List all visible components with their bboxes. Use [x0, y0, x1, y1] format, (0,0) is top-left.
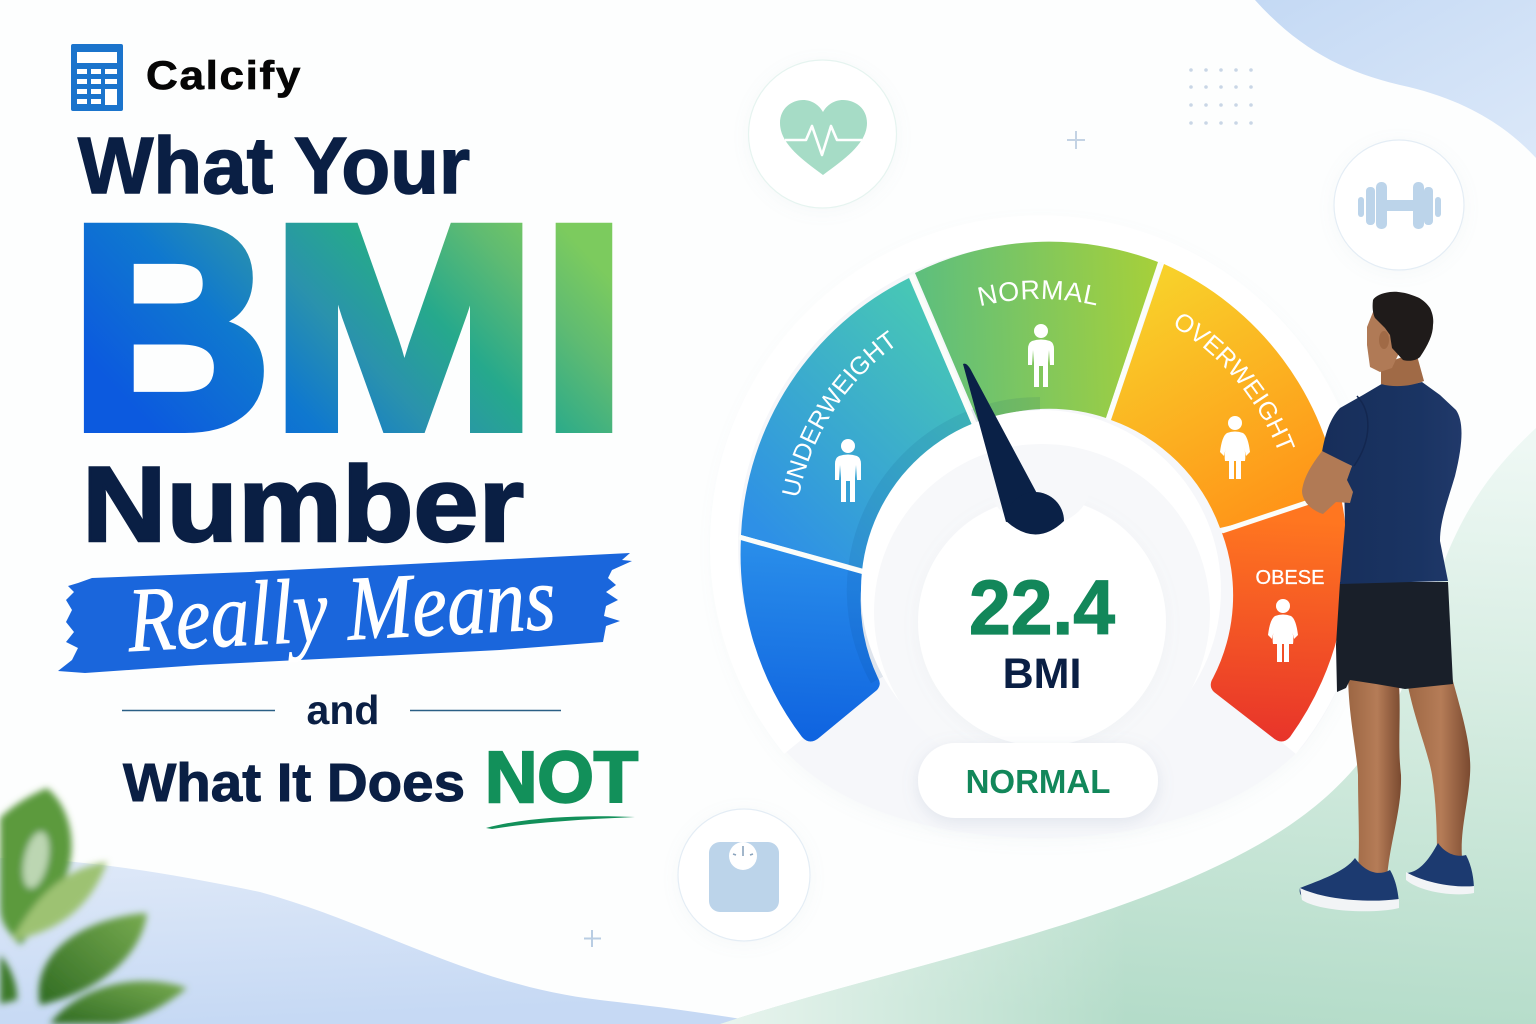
gauge outer white ring [724, 229, 1356, 745]
title line: BMI [70, 164, 628, 491]
decorative plus bottom [584, 930, 601, 947]
inner edge shade [854, 404, 1040, 680]
segment: obese [1211, 493, 1347, 742]
divider left [122, 710, 275, 712]
shirt [1322, 382, 1462, 584]
hair [1373, 292, 1433, 361]
logo text: Calcify [146, 54, 302, 98]
subtitle: NOT: NOT [485, 738, 638, 818]
icon: scale circle [678, 809, 810, 941]
person icon underweight [835, 439, 861, 502]
neck [1381, 352, 1424, 386]
leaves: blurred plant [0, 788, 187, 1024]
logo: calculator icon [71, 44, 123, 111]
background blob: bottom left blue [0, 858, 770, 1024]
subtitle: What It Does: What It Does [123, 753, 465, 813]
icon: dumbbell circle [1334, 140, 1464, 270]
label: UNDERWEIGHT: UNDERWEIGHT [782, 330, 894, 496]
background blob: bottom right green [720, 428, 1536, 1024]
centre white dial [918, 498, 1166, 746]
segment: normal [915, 242, 1158, 423]
back leg [1405, 670, 1470, 858]
decorative dot grid [1189, 68, 1253, 125]
label: OVERWEIGHT: OVERWEIGHT [1176, 314, 1295, 448]
value: 22.4: 22.4 [969, 565, 1115, 651]
title line: BMI: B [70, 166, 272, 490]
person icon normal [1028, 324, 1054, 387]
icon: heart circle [748, 60, 896, 208]
NOT underline swoosh [486, 816, 635, 829]
label: NORMAL: NORMAL [978, 280, 1096, 306]
status text: NORMAL [966, 763, 1110, 800]
man standing [1300, 292, 1474, 911]
needle notch [990, 446, 1090, 526]
arm [1302, 451, 1353, 514]
segment dividers [739, 262, 1345, 572]
label: OBESE: OBESE [1256, 567, 1324, 589]
status pill [918, 743, 1158, 818]
person icon overweight [1220, 416, 1250, 479]
title line: Number: Number [82, 444, 524, 564]
person icon obese [1268, 599, 1298, 662]
front leg [1348, 670, 1401, 878]
title line: BMI: I [540, 164, 628, 490]
title line: BMI: M [270, 166, 538, 491]
inner pale disc [874, 444, 1210, 780]
segment: blue base [741, 538, 880, 742]
brush stroke banner [58, 553, 632, 673]
front shoe [1300, 858, 1399, 906]
face [1367, 312, 1405, 372]
segment: underweight [741, 278, 973, 569]
needle [963, 364, 1048, 522]
shorts [1336, 582, 1453, 692]
needle hub [1006, 492, 1064, 534]
inner white band [861, 410, 1221, 770]
back shoe [1407, 843, 1474, 891]
title line: What Your: What Your [78, 121, 470, 210]
divider right [410, 710, 561, 712]
background blob: top right blue [1255, 0, 1536, 158]
segment: overweight [1111, 264, 1340, 528]
decorative plus top [1067, 131, 1085, 149]
word: and: and [307, 687, 379, 733]
gauge backing plate [714, 220, 1370, 838]
banner text: Really Means: Really Means [124, 547, 558, 671]
gauge [740, 242, 1345, 838]
value label: BMI: BMI [1003, 650, 1081, 698]
sleeve seam [1354, 396, 1368, 466]
ear [1379, 331, 1389, 349]
